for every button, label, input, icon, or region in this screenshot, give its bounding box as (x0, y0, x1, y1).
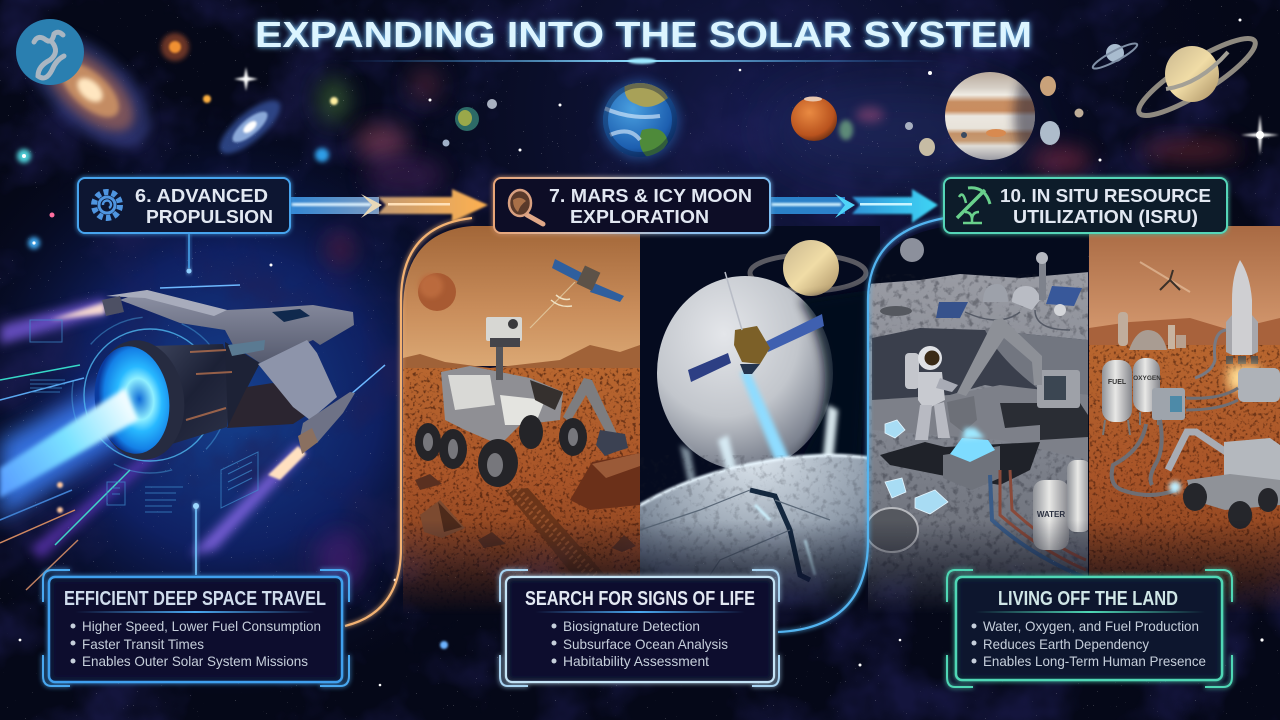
ship cylinder (88, 334, 260, 466)
fuel and oxygen tanks (1102, 358, 1161, 435)
drone in sky (1140, 262, 1190, 292)
astronaut (905, 346, 958, 440)
heading: EFFICIENT DEEP SPACE TRAVEL (64, 588, 326, 610)
planet: small ringed world (1091, 40, 1139, 72)
bullet list: Water, Oxygen, and Fuel Production (983, 618, 1199, 634)
bullet list (70, 618, 321, 669)
heading text: PROPULSION (146, 207, 273, 227)
icy surface (640, 455, 867, 606)
fuel and oxygen tanks: OXYGEN (1133, 375, 1161, 382)
ice cracks (640, 490, 830, 590)
bullet list: Enables Long-Term Human Presence (983, 653, 1206, 669)
sparkle star (1241, 115, 1279, 155)
callout: Living Off the Land (947, 570, 1232, 687)
planets row (442, 27, 1279, 168)
planet: small green world (455, 107, 479, 131)
heading text: 7. MARS & ICY MOON (549, 186, 752, 206)
processing unit and piping (1112, 368, 1280, 495)
icon: gear (94, 192, 120, 218)
connector: ship to callout (193, 503, 199, 575)
connector: orange curved path (345, 218, 472, 626)
ship hull (102, 290, 354, 363)
ice plumes (680, 372, 838, 490)
bullet list: Reduces Earth Dependency (983, 636, 1149, 652)
planet: small moons by green world (442, 99, 497, 146)
bullet list: Enables Outer Solar System Missions (82, 653, 308, 669)
heading text: 6. ADVANCED (135, 186, 268, 206)
panel: Mars rover scene (400, 226, 640, 622)
panel: icy moon scene (640, 226, 880, 640)
base domes and solar panels (880, 252, 1082, 330)
icon: pickaxe and sprout (957, 188, 990, 223)
rocks (415, 453, 640, 552)
bullet list: Subsurface Ocean Analysis (563, 636, 728, 652)
icon: magnifier (509, 190, 543, 224)
panel: lunar ISRU scene (868, 228, 1088, 606)
planet: Jupiter (945, 72, 1035, 160)
logo badge (16, 19, 84, 85)
orbiter satellite (530, 259, 624, 328)
decorative galaxies and stars (10, 12, 338, 168)
rover tracks (505, 488, 605, 578)
large icy moon (657, 276, 833, 470)
callout: Efficient Deep Space Travel (43, 570, 349, 686)
heading: SEARCH FOR SIGNS OF LIFE (525, 588, 755, 610)
small moon in sky (900, 238, 924, 262)
arrow: propulsion to Mars (291, 189, 488, 222)
distant habitat dome (1118, 312, 1186, 350)
connector: box 6 to ship (186, 233, 192, 274)
bullet list (972, 618, 1206, 669)
header box: 6 Advanced Propulsion (78, 178, 290, 233)
planet: Saturn (1131, 27, 1263, 127)
Mars in the sky (418, 273, 456, 311)
nebula wisp beside Mars (839, 120, 853, 140)
heading text: EXPLORATION (570, 207, 709, 227)
arrow: Mars to ISRU (771, 189, 938, 223)
divider: Mars and icy moon (639, 233, 641, 572)
bullet list: Biosignature Detection (563, 618, 700, 634)
lunar ground (868, 272, 1090, 640)
header box: 10 ISRU (944, 178, 1227, 233)
heading: LIVING OFF THE LAND (998, 588, 1178, 610)
panel: spaceship illustration (0, 285, 385, 590)
callout: Search for Signs of Life (500, 570, 779, 686)
planet: Mars (791, 96, 837, 141)
header box: 7 Mars and Icy Moon Exploration (494, 178, 770, 233)
ringed planet (750, 240, 866, 296)
bullet list: Higher Speed, Lower Fuel Consumption (82, 618, 321, 634)
excavator (947, 318, 1088, 440)
ship lower wing and engine (227, 340, 355, 454)
HUD readouts (30, 320, 258, 512)
mining rover (1168, 432, 1280, 529)
water tanks and pipes (990, 460, 1091, 578)
title: EXPANDING INTO THE SOLAR SYSTEM (255, 14, 1032, 55)
hole around ice crate (880, 442, 1040, 485)
heading text: UTILIZATION (ISRU) (1013, 207, 1198, 227)
probe spacecraft (688, 272, 824, 382)
ice blocks (885, 420, 948, 514)
fuel and oxygen tanks: FUEL (1108, 379, 1127, 386)
bullet list: Faster Transit Times (82, 636, 204, 652)
heading text: 10. IN SITU RESOURCE (1000, 186, 1211, 206)
water tanks and pipes: WATER (1037, 510, 1065, 519)
excavation pit (872, 328, 1088, 402)
rocket (1195, 260, 1260, 390)
panel: Mars ISRU scene (1089, 226, 1280, 635)
bullet list: Habitability Assessment (563, 653, 709, 669)
rover (415, 317, 628, 487)
distant hills (403, 345, 640, 368)
divider: lunar and Mars ISRU (1087, 233, 1089, 578)
crater (866, 508, 918, 552)
HUD rings (72, 317, 228, 473)
planet: Jupiter moons (905, 76, 1084, 156)
planet: Earth (600, 80, 680, 160)
connector: blue curved path (778, 218, 945, 632)
main engine beam (0, 388, 138, 498)
bullet list (552, 618, 728, 669)
ice crate (943, 428, 1000, 490)
engine beams and motion streaks (0, 285, 385, 590)
